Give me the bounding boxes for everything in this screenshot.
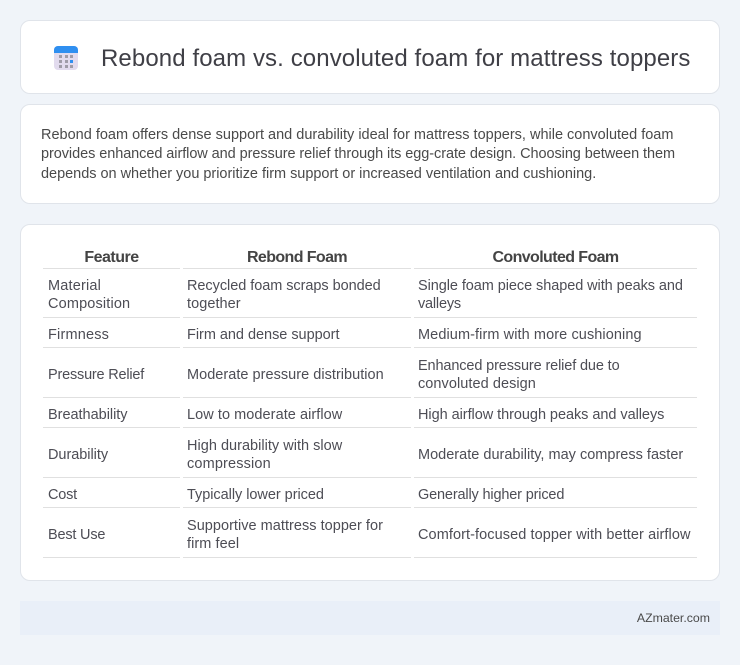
panel: title — [20, 20, 720, 94]
row: cost: Typically lower priced — [187, 487, 324, 503]
row: cost — [43, 487, 697, 508]
row: durability: Durability — [48, 447, 108, 463]
row: durability — [43, 438, 697, 478]
row: material composition: Material — [48, 278, 101, 294]
row: cost: Generally higher priced — [418, 487, 564, 503]
row: breathability: Breathability — [48, 407, 128, 423]
row: material composition: valleys — [418, 296, 461, 312]
row: pressure relief: convoluted design — [418, 376, 536, 392]
table header — [43, 249, 697, 269]
row: breathability: High airflow through peaks and valleys — [418, 407, 664, 423]
table header: Rebond Foam — [247, 249, 347, 266]
row: durability: Moderate durability, may compress faster — [418, 447, 683, 463]
row: breathability — [43, 407, 697, 428]
row: best use: Supportive mattress topper for — [187, 518, 383, 534]
panel: summary — [20, 104, 720, 204]
row: breathability: Low to moderate airflow — [187, 407, 342, 423]
summary text: depends on whether you prioritize firm support or increased ventilation and cushioning. — [41, 166, 596, 182]
panel: comparison table — [20, 224, 720, 581]
row: best use: firm feel — [187, 536, 239, 552]
row: firmness — [43, 327, 697, 348]
title text: Rebond foam vs. convoluted foam for mattress toppers — [101, 45, 690, 72]
summary text — [41, 127, 675, 182]
row: pressure relief: Moderate pressure distribution — [187, 367, 384, 383]
footer bar — [20, 601, 720, 635]
row: cost: Cost — [48, 487, 77, 503]
table header: Convoluted Foam — [492, 249, 619, 266]
row: material composition: together — [187, 296, 241, 312]
summary text: Rebond foam offers dense support and durability ideal for mattress toppers, while convoluted foam — [41, 127, 673, 143]
row: material composition — [43, 278, 697, 318]
row: pressure relief: Enhanced pressure relief due to — [418, 358, 620, 374]
row: best use: Best Use — [48, 527, 105, 543]
row: firmness: Medium-firm with more cushioning — [418, 327, 642, 343]
row: best use: Comfort-focused topper with better airflow — [418, 527, 691, 543]
row: firmness: Firmness — [48, 327, 109, 343]
summary text: provides enhanced airflow and pressure relief through its egg-crate design. Choosing between them — [41, 146, 675, 162]
row: pressure relief — [43, 358, 697, 398]
row: pressure relief: Pressure Relief — [48, 367, 144, 383]
table header: Feature — [84, 249, 139, 266]
footer credit: AZmater.com — [637, 611, 710, 625]
row: firmness: Firm and dense support — [187, 327, 339, 343]
icon: calendar — [54, 46, 78, 70]
row: material composition: Composition — [48, 296, 130, 312]
row: durability: compression — [187, 456, 271, 472]
row: material composition: Single foam piece shaped with peaks and — [418, 278, 683, 294]
row: material composition: Recycled foam scraps bonded — [187, 278, 381, 294]
row: durability: High durability with slow — [187, 438, 342, 454]
row: best use — [43, 518, 697, 558]
